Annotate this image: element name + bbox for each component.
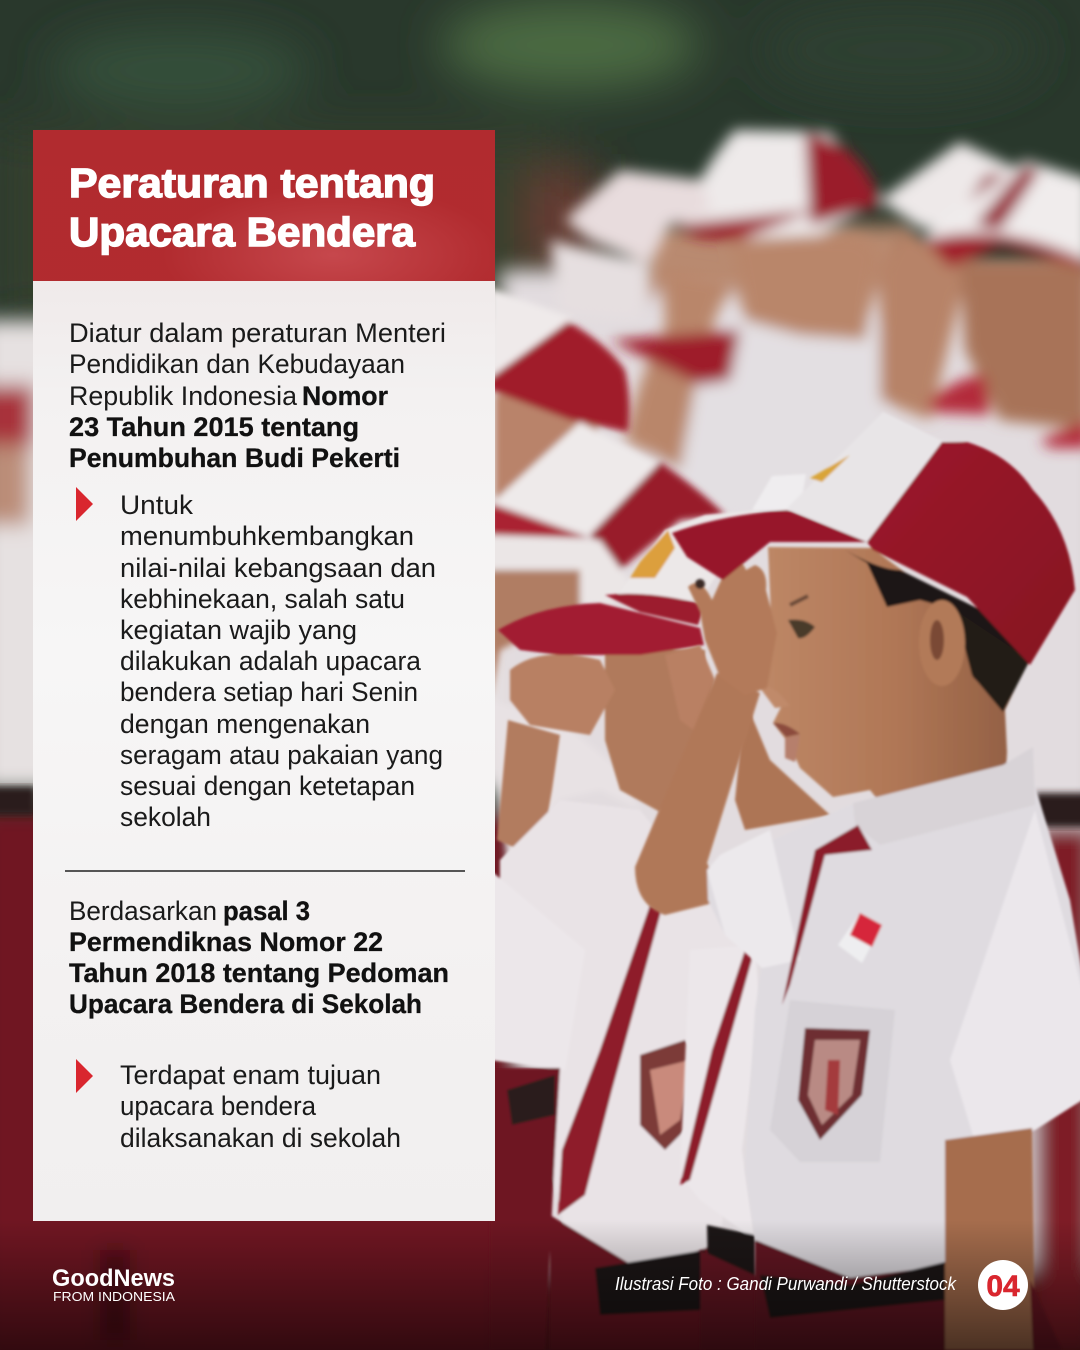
divider	[65, 870, 465, 872]
neck and face	[762, 547, 1027, 815]
text block: bullet 1: seragam atau pakaian yang	[120, 740, 443, 770]
panel: body background	[33, 281, 495, 1221]
text block: regulation 2018: Upacara Bendera di Sekolah	[69, 989, 422, 1019]
collar	[853, 747, 1035, 845]
rear belts	[0, 787, 1080, 827]
text block: bullet 2: Terdapat enam tujuan	[120, 1060, 381, 1090]
text block: regulation 2015: Nomor	[302, 381, 388, 411]
text block: bullet 1: sekolah	[120, 802, 211, 832]
text block: regulation 2018	[69, 896, 449, 1019]
panel: header background	[33, 130, 495, 281]
text block: regulation 2015: Pendidikan dan Kebudayaan	[69, 349, 405, 379]
text block: bullet 1: sesuai dengan ketetapan	[120, 771, 415, 801]
text block: regulation 2018: Berdasarkan	[69, 896, 217, 926]
text block: regulation 2015: 23 Tahun 2015 tentang	[69, 412, 359, 442]
title: Upacara Bendera	[69, 209, 416, 255]
text block: bullet 1: kebhinekaan, salah satu	[120, 584, 405, 614]
flag badge	[838, 913, 882, 963]
belt and trousers	[755, 1240, 950, 1350]
page number badge	[978, 1260, 1028, 1310]
text block: regulation 2018: Tahun 2018 tentang Pedoman	[69, 958, 449, 988]
text block: bullet 2	[120, 1060, 401, 1153]
cap	[752, 474, 806, 510]
hair	[845, 550, 1030, 707]
school badge	[798, 1028, 870, 1140]
text block: bullet 2: upacara bendera	[120, 1091, 317, 1121]
main student	[635, 412, 1080, 1350]
text block: bullet 1: bendera setiap hari Senin	[120, 677, 418, 707]
foliage blur	[0, 0, 1040, 320]
title	[69, 160, 435, 255]
text block: bullet 1: dengan mengenakan	[120, 709, 370, 739]
logo: GoodNews from Indonesia: FROM INDONESIA	[53, 1289, 175, 1304]
ear	[919, 600, 965, 686]
text block: bullet 1: dilakukan adalah upacara	[120, 646, 422, 676]
icon: red arrow bullet 1	[76, 487, 93, 521]
main student shirt	[707, 770, 1080, 1278]
text block: bullet 2: dilaksanakan di sekolah	[120, 1123, 401, 1153]
text block: regulation 2018: pasal 3	[223, 896, 310, 926]
logo: GoodNews from Indonesia: GoodNews	[52, 1265, 175, 1292]
page number badge: 04	[986, 1270, 1020, 1303]
rear students, top right	[550, 130, 1080, 520]
neighbouring student	[665, 645, 830, 1350]
title: Peraturan tentang	[69, 160, 435, 206]
text block: bullet 1: kegiatan wajib yang	[120, 615, 357, 645]
main student arm	[635, 673, 760, 915]
text block: regulation 2015: Penumbuhan Budi Pekerti	[69, 443, 400, 473]
logo: GoodNews from Indonesia	[52, 1265, 175, 1304]
tie	[782, 825, 872, 1005]
text block: regulation 2015	[69, 318, 446, 473]
second student	[490, 510, 760, 1350]
text block: regulation 2015: Republik Indonesia	[69, 381, 298, 411]
text block: bullet 1	[120, 490, 443, 832]
eye	[788, 620, 815, 638]
bottom darkening	[0, 1220, 1080, 1350]
text block: bullet 1: Untuk	[120, 490, 194, 520]
icon: red arrow bullet 2	[76, 1059, 93, 1093]
middle students	[490, 288, 725, 880]
text block: regulation 2018: Permendiknas Nomor 22	[69, 927, 383, 957]
shirt shading	[885, 970, 975, 1250]
photo credit: Ilustrasi Foto : Gandi Purwandi / Shutterstock	[615, 1274, 957, 1294]
salute hand	[688, 561, 777, 695]
text block: bullet 1: nilai-nilai kebangsaan dan	[120, 553, 436, 583]
text block: regulation 2015: Diatur dalam peraturan Menteri	[69, 318, 446, 348]
text block: bullet 1: menumbuhkembangkan	[120, 521, 414, 551]
